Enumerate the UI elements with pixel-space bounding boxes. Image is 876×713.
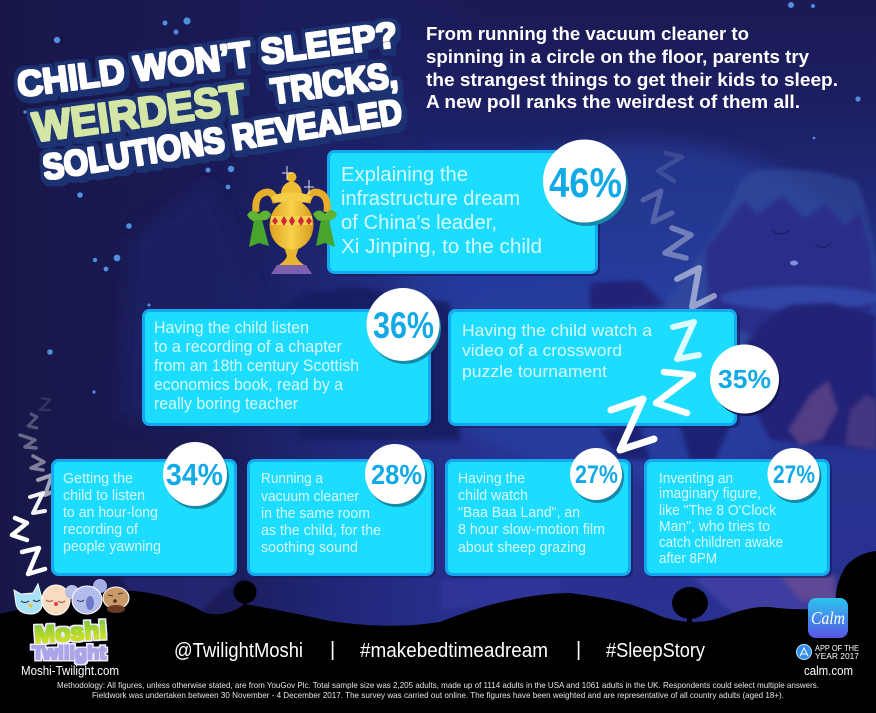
hashtags row: [174, 639, 705, 662]
zzz trail, left: [12, 398, 59, 574]
panel: 34% people yawning: recording of: [63, 521, 139, 538]
hashtags row: #SleepStory: [606, 640, 705, 662]
intro text: the strangest things to get their kids to sleep.: [426, 70, 838, 90]
title: WEIRDEST: [30, 75, 248, 151]
icon: Calm app: Calm: [811, 608, 845, 628]
badge: 28%: [365, 444, 427, 507]
badge: 34%: [163, 442, 229, 509]
panel: 36% Scottish economics book: [144, 288, 441, 428]
badge: 35%: 35%: [718, 364, 771, 394]
badge: 36%: 36%: [373, 305, 434, 346]
panel: 28% vacuum cleaner: vacuum cleaner: [261, 488, 359, 505]
panel: 34% people yawning: to an hour-long: [63, 504, 158, 521]
badge: 46%: [543, 140, 628, 226]
logo: Moshi Twilight: Moshi: [34, 617, 107, 649]
intro text: spinning in a circle on the floor, parents try: [426, 47, 809, 67]
hashtags row: |: [330, 639, 335, 661]
panel: 36% Scottish economics book: really boring teacher: [154, 395, 298, 413]
methodology note: Methodology: All figures, unless otherwise stated, are from YouGov Plc. Total sample size was 2,205 adults, made up of 1114 adults in the USA and 1061 adults in the UK. Respondents could select multiple answers.: [57, 680, 819, 690]
panel: 27% Baa Baa Land: about sheep grazing: [458, 539, 586, 556]
panel: 27% Baa Baa Land: child watch: [458, 487, 528, 504]
mascot: koala: [65, 579, 107, 614]
badge: 27%: 27%: [575, 461, 618, 489]
zzz trail, foreground: [611, 322, 699, 450]
badge: 46%: 46%: [549, 159, 622, 206]
panel: 27% The 8 O'Clock Man: catch children awake: [659, 535, 783, 551]
footer silhouette hills and trees: [0, 551, 876, 713]
calm.com link: calm.com: [804, 663, 853, 678]
mascot: cream cat: [42, 585, 70, 615]
panel: 28% vacuum cleaner: soothing sound: [261, 539, 358, 556]
hashtags row: |: [576, 639, 581, 661]
panel: 27% Baa Baa Land: Having the: [458, 470, 525, 487]
panel: 28% vacuum cleaner: [248, 444, 436, 578]
badge: 34%: 34%: [166, 457, 223, 492]
panel: 35% crossword puzzle tournament: puzzle tournament: [462, 363, 607, 381]
panel: 28% vacuum cleaner: in the same room: [261, 505, 370, 522]
panel: 46% explaining the infrastructure dream: infrastructure dream: [341, 188, 520, 210]
badge: 27%: [570, 448, 624, 503]
panel: 36% Scottish economics book: economics book, read by a: [154, 376, 344, 394]
panel: 27% Baa Baa Land: "Baa Baa Land", an: [458, 504, 580, 521]
stars: [23, 2, 861, 394]
methodology note: Fieldwork was undertaken between 30 November - 4 December 2017. The survey was carried out online. The figures have been weighted and are representative of all country adults (aged 18+).: [92, 690, 784, 700]
mascots: sleeping Moshi characters: [14, 579, 129, 615]
panel: 34% people yawning: people yawning: [63, 538, 161, 555]
panel: 27% The 8 O'Clock Man: imaginary figure,: [659, 486, 761, 502]
hashtags row: @TwilightMoshi: [174, 640, 303, 662]
title: SOLUTIONS REVEALED: [40, 91, 405, 188]
panel: 36% Scottish economics book: Having the child listen: [154, 319, 309, 337]
title: [15, 14, 405, 188]
panel: 35% crossword puzzle tournament: video of a crossword: [462, 342, 622, 360]
panel: 34% people yawning: Getting the: [63, 470, 133, 487]
panel: 27% Baa Baa Land: [446, 448, 633, 578]
logo: Moshi Twilight: [32, 617, 107, 663]
panel: 34% people yawning: [52, 442, 239, 578]
panel: 34% people yawning: child to listen: [63, 487, 145, 504]
intro text: [426, 24, 838, 112]
mascot: owl: [14, 584, 42, 614]
badge: 27%: 27%: [773, 461, 815, 489]
badge: 28%: 28%: [371, 459, 422, 490]
logo caption: Moshi-Twilight.com: Moshi-Twilight.com: [21, 663, 119, 678]
panel: 27% The 8 O'Clock Man: like "The 8 O'Clock: [659, 503, 777, 519]
zzz trail, right: [643, 153, 714, 307]
logo: Moshi Twilight: Twilight: [32, 643, 106, 663]
panel: 46% explaining the infrastructure dream: Explaining the: [341, 164, 468, 186]
badge: App of the Year 2017: YEAR 2017: [815, 652, 860, 661]
panel: 35% crossword puzzle tournament: Having the child watch a: [462, 322, 653, 340]
badge: 36%: [366, 288, 441, 364]
methodology note: [57, 680, 819, 700]
panel: 27% Baa Baa Land: 8 hour slow-motion film: [458, 521, 605, 538]
panel: 27% The 8 O'Clock Man: [646, 448, 832, 578]
mascot: brown critter: [103, 587, 129, 613]
hashtags row: #makebedtimeadream: [360, 640, 548, 662]
panel: 27% The 8 O'Clock Man: Inventing an: [659, 471, 733, 487]
panel: 28% vacuum cleaner: as the child, for the: [261, 522, 381, 539]
title: CHILD WON’T SLEEP?: [15, 14, 400, 105]
panel: 28% vacuum cleaner: Running a: [261, 470, 324, 487]
panel: 46% explaining the infrastructure dream: Xi Jinping, to the child: [341, 236, 542, 258]
title: TRICKS,: [268, 54, 400, 112]
panel: 36% Scottish economics book: to a recording of a chapter: [154, 338, 342, 356]
badge: 27%: [768, 448, 822, 503]
badge: App of the Year 2017: APP OF THE: [815, 644, 859, 653]
panel: 27% The 8 O'Clock Man: Man", who tries to: [659, 519, 770, 535]
badge: App of the Year 2017: [796, 644, 860, 661]
intro text: From running the vacuum cleaner to: [426, 24, 749, 44]
panel: 35% crossword puzzle tournament: [450, 310, 780, 428]
panel: 36% Scottish economics book: from an 18th century Scottish: [154, 357, 359, 375]
panel: 46% explaining the infrastructure dream: of China's leader,: [341, 212, 497, 234]
panel: 27% The 8 O'Clock Man: after 8PM: [659, 551, 717, 567]
mountain with sleeping face: [650, 169, 876, 360]
badge: 35%: [710, 344, 780, 416]
icon: gold trophy: [247, 166, 337, 274]
icon: Calm app: [808, 598, 848, 638]
panel: 46% explaining the infrastructure dream: [328, 140, 628, 276]
intro text: A new poll ranks the weirdest of them all.: [426, 92, 800, 112]
